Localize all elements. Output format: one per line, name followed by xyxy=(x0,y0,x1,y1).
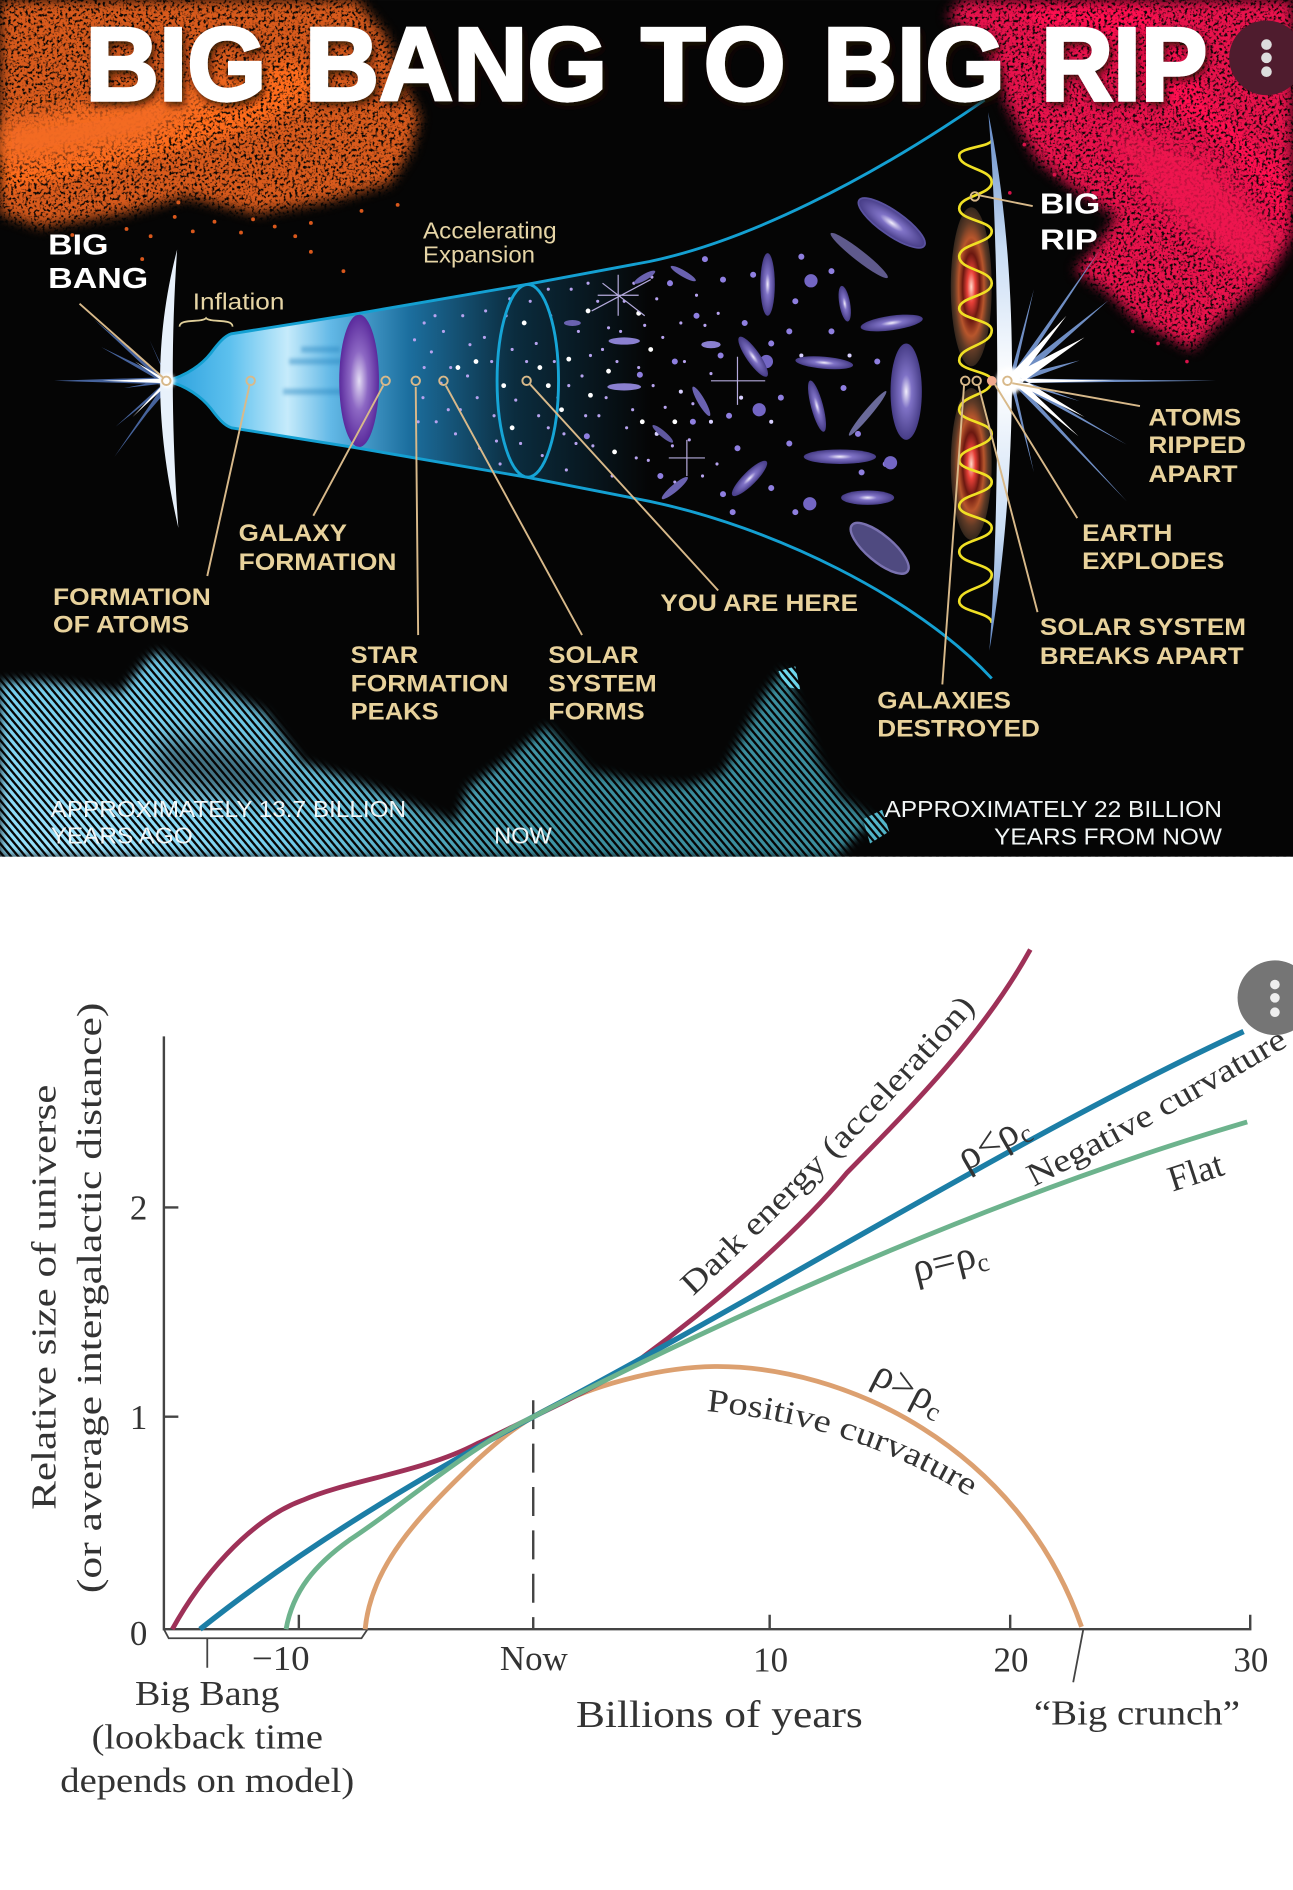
axis numbers: 1 xyxy=(130,1398,147,1437)
label: big rip: RIP xyxy=(1040,224,1098,256)
label: 22 billion years from now: YEARS FROM NOW xyxy=(994,824,1223,850)
label: galaxy formation: GALAXY xyxy=(239,520,347,547)
label: big bang lookback: depends on model) xyxy=(60,1761,354,1800)
panel: expansion models chart xyxy=(0,856,1293,1800)
label: rho greater than critical: ρ>ρ xyxy=(866,1349,944,1419)
label: galaxies destroyed xyxy=(877,688,1040,742)
cyan halftone ground xyxy=(0,639,1293,857)
label: big bang lookback: (lookback time xyxy=(92,1718,323,1757)
label: big bang lookback: Big Bang xyxy=(135,1674,280,1713)
label: you are here: YOU ARE HERE xyxy=(660,590,858,617)
label: dark energy: Dark energy (acceleration) xyxy=(679,999,975,1296)
title: TO xyxy=(641,6,786,122)
label: galaxy formation xyxy=(239,520,396,576)
label: atoms ripped apart: RIPPED xyxy=(1148,432,1246,459)
label: accelerating expansion: Expansion xyxy=(423,242,535,268)
label: 22 billion years from now: APPROXIMATELY 22 BILLION xyxy=(884,796,1222,822)
label: big bang lookback xyxy=(60,1674,354,1800)
icon: menu button chart xyxy=(1238,960,1293,1035)
label: galaxy formation: FORMATION xyxy=(239,549,396,576)
y-axis title: (or average intergalactic distance) xyxy=(70,1003,109,1593)
label: positive curvature: Positive curvature xyxy=(708,1390,974,1495)
label: atoms ripped apart: ATOMS xyxy=(1148,404,1241,431)
axis numbers: 30 xyxy=(1233,1640,1268,1679)
label: negative curvature: Negative curvature xyxy=(1025,1035,1286,1186)
label: earth explodes xyxy=(1082,520,1224,575)
y-axis title: Relative size of universe xyxy=(24,1085,63,1510)
label: accelerating expansion xyxy=(423,218,557,268)
axis numbers: 2 xyxy=(130,1189,147,1228)
label: rho equals critical: c xyxy=(974,1246,992,1278)
big rip fireballs xyxy=(951,207,992,540)
label: solar system forms: SYSTEM xyxy=(548,671,657,698)
pink nebula xyxy=(947,0,1293,362)
label: rho less than critical: c xyxy=(1013,1118,1038,1150)
label: 13.7 billion years ago: YEARS AGO xyxy=(51,823,193,849)
curve: dark energy xyxy=(172,950,1030,1629)
label: star formation peaks: FORMATION xyxy=(351,671,509,698)
label: atoms ripped apart xyxy=(1148,404,1246,488)
label: galaxies destroyed: GALAXIES xyxy=(877,688,1011,715)
cone outline xyxy=(166,100,992,678)
label: earth explodes: EARTH xyxy=(1082,520,1172,547)
big rip burst xyxy=(988,112,1216,651)
title xyxy=(86,6,1207,122)
curve: flat xyxy=(286,1122,1247,1629)
label: rho less than critical: ρ<ρ xyxy=(948,1107,1026,1179)
label: rho greater than critical: c xyxy=(922,1395,946,1427)
label: flat: Flat xyxy=(1163,1144,1228,1199)
label: formation of atoms: FORMATION xyxy=(53,584,211,611)
label: galaxies destroyed: DESTROYED xyxy=(877,715,1040,742)
axis numbers: 10 xyxy=(753,1640,788,1679)
label: solar system breaks apart xyxy=(1040,614,1246,670)
title: RIP xyxy=(1041,6,1207,122)
label: big bang: BANG xyxy=(48,263,148,295)
chart axes xyxy=(164,1036,1250,1682)
title: BANG xyxy=(305,6,607,122)
label: now: NOW xyxy=(494,823,553,849)
label: solar system forms: SOLAR xyxy=(548,642,639,669)
curve: negative curvature xyxy=(200,1032,1244,1629)
label: star formation peaks: PEAKS xyxy=(351,698,439,725)
curve: positive curvature xyxy=(365,1367,1082,1629)
y-axis title xyxy=(24,1003,109,1593)
current-epoch ring xyxy=(497,284,559,477)
label: big bang: BIG xyxy=(48,229,108,261)
label: formation of atoms: OF ATOMS xyxy=(53,612,189,639)
big bang burst xyxy=(54,249,178,528)
expansion cone xyxy=(166,100,992,678)
label: big bang xyxy=(48,229,148,295)
label: inflation: Inflation xyxy=(193,289,284,315)
label: accelerating expansion: Accelerating xyxy=(423,218,557,244)
title: BIG xyxy=(823,6,1005,122)
label: solar system forms: FORMS xyxy=(548,698,645,725)
label: earth explodes: EXPLODES xyxy=(1082,548,1224,575)
leader lines and markers xyxy=(80,192,1140,684)
galaxies xyxy=(564,190,931,582)
label: star formation peaks xyxy=(351,642,509,725)
label: big crunch: “Big crunch” xyxy=(1034,1693,1240,1732)
big rip wave xyxy=(959,140,992,623)
label: big rip: BIG xyxy=(1040,188,1100,220)
axis numbers: Now xyxy=(500,1639,569,1678)
panel: big bang to big rip illustration xyxy=(0,0,1293,857)
label: star formation peaks: STAR xyxy=(351,642,418,669)
label: formation of atoms xyxy=(53,584,211,639)
title: BIG xyxy=(86,6,266,122)
label: solar system forms xyxy=(548,642,657,725)
label: 13.7 billion years ago xyxy=(51,796,406,849)
label: big rip xyxy=(1040,188,1100,256)
label: 13.7 billion years ago: APPROXIMATELY 13.7 BILLION xyxy=(51,796,406,822)
label: atoms ripped apart: APART xyxy=(1148,461,1238,488)
inflation brace xyxy=(180,318,233,327)
label: solar system breaks apart: BREAKS APART xyxy=(1040,643,1244,670)
axis numbers: −10 xyxy=(252,1639,310,1678)
label: rho equals critical: ρ=ρ xyxy=(907,1231,980,1291)
axis numbers: 20 xyxy=(994,1640,1028,1679)
purple galaxy disc xyxy=(339,315,379,447)
label: solar system breaks apart: SOLAR SYSTEM xyxy=(1040,614,1246,641)
label: 22 billion years from now xyxy=(884,796,1223,850)
small star field xyxy=(415,257,891,512)
axis numbers: 0 xyxy=(130,1614,147,1653)
x-axis title: Billions of years xyxy=(576,1694,863,1736)
orange nebula xyxy=(0,0,419,271)
icon: menu button top xyxy=(1229,20,1293,95)
axis numbers xyxy=(130,1189,1268,1679)
